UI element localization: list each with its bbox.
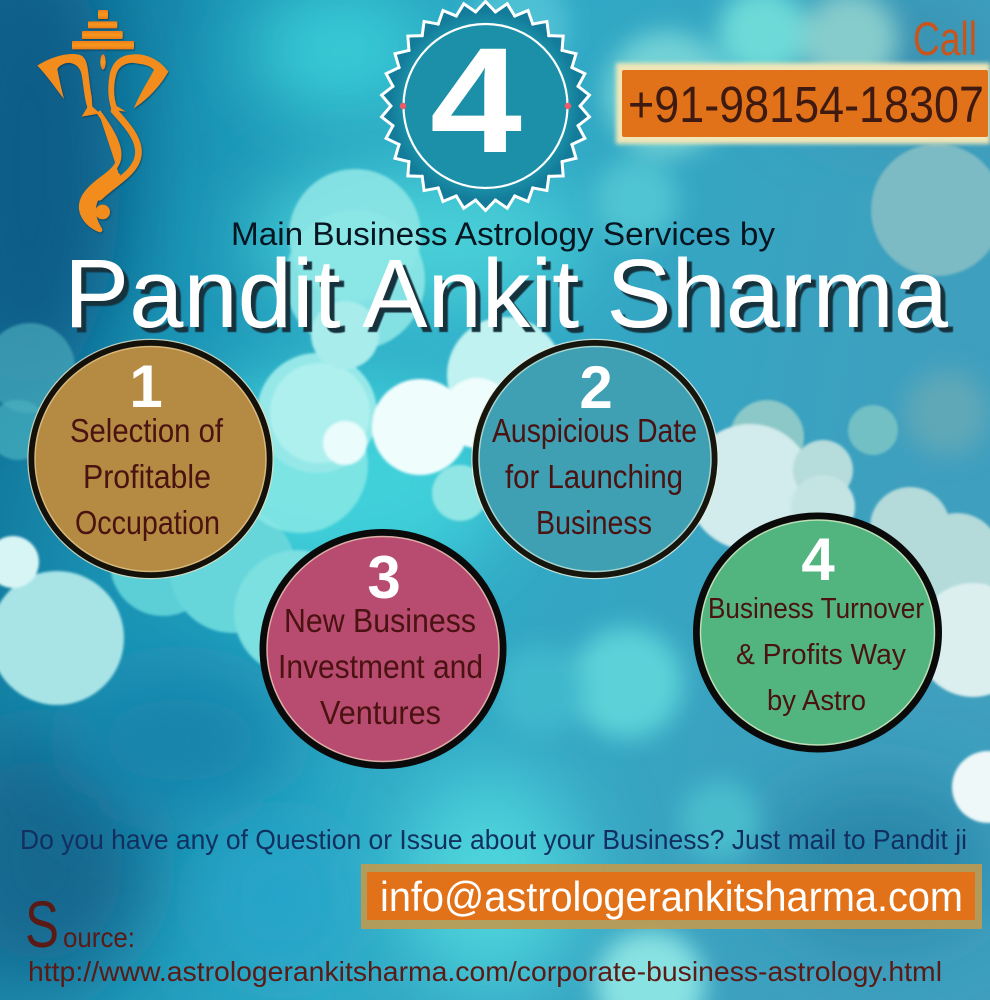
circle 3: new business: Investment and [278,648,483,685]
circle 4: turnover: Business Turnover [708,593,924,625]
source URL: http://www.astrologerankitsharma.com/corporate-business-astrology.html [28,956,942,987]
circle 1: occupation: Occupation [75,504,220,541]
title: Pandit Ankit Sharma [64,239,948,348]
circle 2: auspicious date: Auspicious Date [492,412,697,449]
email box [361,864,982,929]
circle 3: new business: 3 [367,544,401,611]
email box: info@astrologerankitsharma.com [380,873,963,920]
source label: S [25,887,59,961]
circle 3: new business [263,532,503,766]
source label: ource: [63,922,135,953]
circle 1: occupation: 1 [129,353,163,420]
circle 1: occupation: Profitable [83,458,211,495]
circle 4: turnover [696,516,938,749]
circle 2: auspicious date [472,340,718,578]
icon: Ganesha symbol [37,10,168,230]
source label [25,887,135,961]
circle 4: turnover: 4 [801,526,835,593]
circle 2: auspicious date: 2 [579,354,613,421]
badge: number 4 starburst [381,2,590,210]
subtitle: Main Business Astrology Services by [231,216,775,252]
circle 4: turnover: by Astro [767,685,866,717]
circle 3: new business: New Business [284,602,476,639]
circle 2: auspicious date: for Launching [505,458,683,495]
circle 3: new business: Ventures [320,694,441,731]
circle 2: auspicious date: Business [536,504,652,541]
circle 4: turnover: & Profits Way [736,639,906,671]
badge: number 4 starburst: 4 [430,16,522,184]
circle 1: occupation [28,340,273,578]
phone number box [616,63,990,144]
circle 1: occupation: Selection of [70,412,224,449]
